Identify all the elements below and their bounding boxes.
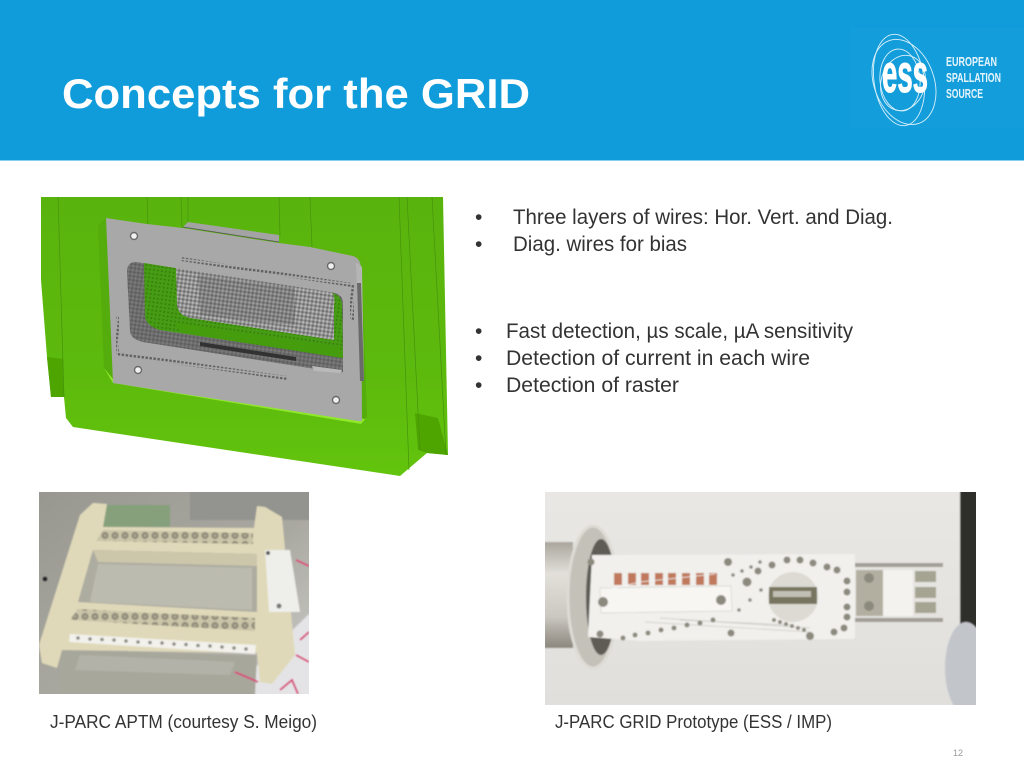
white terminal strip (69, 634, 256, 654)
logo: European Spallation Source (850, 28, 1024, 134)
bullet list: detection: Fast detection, µs scale, µA sensitivity (506, 320, 853, 343)
logo: European Spallation Source: ess (882, 44, 928, 104)
bullet list: detection: • (475, 374, 482, 397)
bullet list: wire layers: Three layers of wires: Hor. Vert. and Diag. (513, 206, 893, 229)
bullet list: detection: Detection of current in each wire (506, 347, 810, 370)
CAD model of grid in green frame (41, 197, 448, 476)
mounting screws (130, 232, 340, 404)
white PCB (265, 550, 300, 612)
board opening (78, 550, 257, 612)
caption: J-PARC GRID prototype: J-PARC GRID Prototype (ESS / IMP) (555, 712, 832, 732)
recess shadow edge (98, 218, 367, 424)
rear tab (183, 222, 279, 242)
title: Concepts for the GRID (62, 70, 530, 117)
logo: European Spallation Source: SOURCE (946, 87, 983, 101)
bullet list: wire layers: • (475, 233, 482, 256)
bullet list: wire layers: • (475, 206, 482, 229)
wire window (127, 262, 343, 373)
central aperture (768, 572, 818, 622)
flange and pipe (543, 542, 573, 648)
bullet list: detection: Detection of raster (506, 374, 679, 397)
cream board (39, 503, 295, 684)
metal plate (106, 218, 364, 421)
bullet list: detection: • (475, 320, 482, 343)
logo: European Spallation Source: EUROPEAN (946, 55, 997, 69)
photo: J-PARC APTM board (37, 490, 311, 696)
cover plate (600, 586, 732, 613)
red marker (235, 560, 309, 694)
bullet list: detection (475, 320, 853, 397)
board wires and screws (645, 618, 810, 632)
screw rows (96, 530, 253, 544)
connector end (855, 563, 943, 567)
photo: J-PARC GRID prototype (543, 490, 987, 714)
logo: European Spallation Source: SPALLATION (946, 71, 1001, 85)
bullet list: detection: • (475, 347, 482, 370)
page number: 12 (953, 748, 963, 758)
caption: J-PARC APTM: J-PARC APTM (courtesy S. Meigo) (50, 712, 317, 732)
perforation rows (116, 257, 354, 380)
resistors (614, 573, 717, 585)
header banner (0, 0, 1024, 160)
bullet list: wire layers: Diag. wires for bias (513, 233, 687, 256)
white board (588, 554, 855, 641)
bullet list: wire layers (475, 206, 893, 256)
